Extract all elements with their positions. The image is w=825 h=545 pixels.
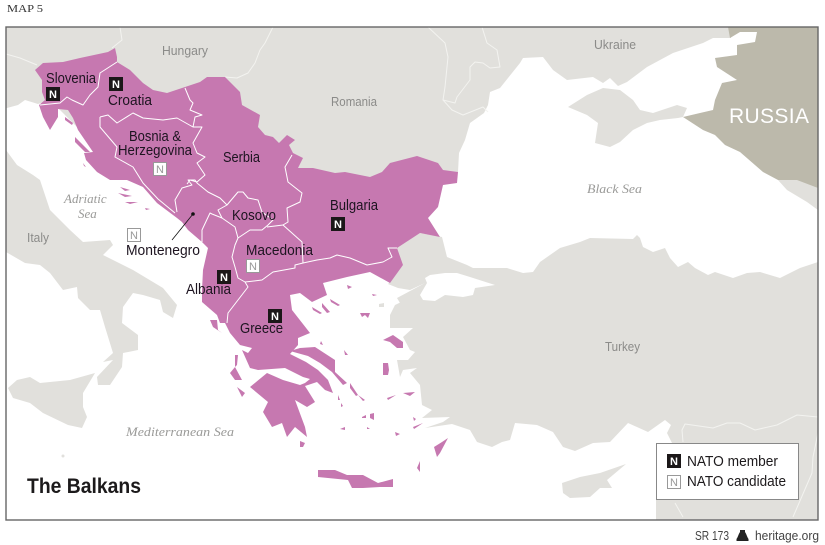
badge: Macedonia NATO candidate: N	[249, 261, 257, 273]
label: Bulgaria: Bulgaria	[330, 198, 379, 214]
footer: report number: SR 173	[695, 528, 729, 543]
land: Sicily	[8, 373, 95, 428]
label: Adriatic Sea: Sea	[78, 206, 97, 221]
label: Adriatic Sea: Adriatic	[63, 191, 107, 206]
legend: NATO member: N	[670, 456, 678, 468]
badge: Bosnia NATO candidate	[154, 162, 166, 176]
label: Hungary: Hungary	[162, 43, 208, 58]
badge: Albania NATO member	[217, 270, 231, 284]
land: northern Europe	[6, 28, 731, 177]
badge: Greece NATO member	[268, 309, 282, 323]
label: Greece: Greece	[240, 321, 283, 337]
legend	[656, 444, 798, 500]
label: Italy: Italy	[27, 230, 49, 245]
badge: Montenegro NATO candidate	[128, 228, 140, 242]
legend: NATO candidate: N	[670, 477, 678, 489]
land: Crimea	[568, 88, 687, 147]
land: Malta	[62, 454, 64, 458]
badge: Slovenia NATO member: N	[49, 89, 57, 101]
label: Mediterranean Sea: Mediterranean Sea	[125, 424, 235, 439]
badge: Slovenia NATO member	[46, 87, 60, 101]
heading: map number: MAP 5	[7, 3, 44, 15]
badge: Greece NATO member: N	[271, 311, 279, 323]
sea: Marmara	[420, 273, 495, 301]
footer: website: heritage.org	[755, 528, 819, 543]
land: Georgia	[778, 180, 818, 210]
label: Ukraine: Ukraine	[594, 37, 636, 52]
internal country borders	[40, 62, 397, 323]
label: Russia: RUSSIA	[729, 105, 809, 128]
badge: Bulgaria NATO member: N	[334, 219, 342, 231]
badge: Croatia NATO member: N	[112, 79, 120, 91]
label: Croatia: Croatia	[108, 93, 153, 109]
label: Bosnia and Herzegovina: Bosnia &	[129, 129, 181, 145]
label: Black Sea: Black Sea	[587, 181, 643, 196]
label: Slovenia: Slovenia	[46, 71, 97, 87]
badge: Bulgaria NATO member	[331, 217, 345, 231]
badge: Bosnia NATO candidate: N	[156, 164, 164, 176]
badge: Macedonia NATO candidate	[246, 260, 260, 273]
label: Montenegro: Montenegro	[126, 243, 200, 259]
label: Romania: Romania	[331, 94, 378, 109]
label: Serbia: Serbia	[223, 150, 261, 166]
land: Cyprus	[562, 464, 626, 498]
badge: Montenegro NATO candidate: N	[130, 230, 138, 242]
land: Russia	[683, 27, 818, 188]
badge: Croatia NATO member	[109, 77, 123, 91]
land: Italy	[6, 150, 177, 385]
label: Turkey: Turkey	[605, 339, 640, 354]
legend: NATO candidate: NATO candidate	[687, 473, 786, 490]
label: Albania: Albania	[186, 282, 232, 298]
icon: liberty bell	[736, 530, 748, 541]
land: Turkey and Thrace	[388, 233, 818, 520]
legend: NATO member: NATO member	[687, 453, 778, 470]
label: Macedonia: Macedonia	[246, 243, 314, 259]
title: The Balkans	[27, 475, 141, 498]
label: Bosnia and Herzegovina: Herzegovina	[118, 143, 193, 159]
region: Greek and Adriatic islands	[65, 117, 448, 488]
label: Kosovo: Kosovo	[232, 208, 276, 224]
land: small islands	[379, 303, 384, 307]
badge: Albania NATO member: N	[220, 272, 228, 284]
leader line: Montenegro	[172, 212, 195, 240]
region: Balkan states	[35, 48, 458, 437]
